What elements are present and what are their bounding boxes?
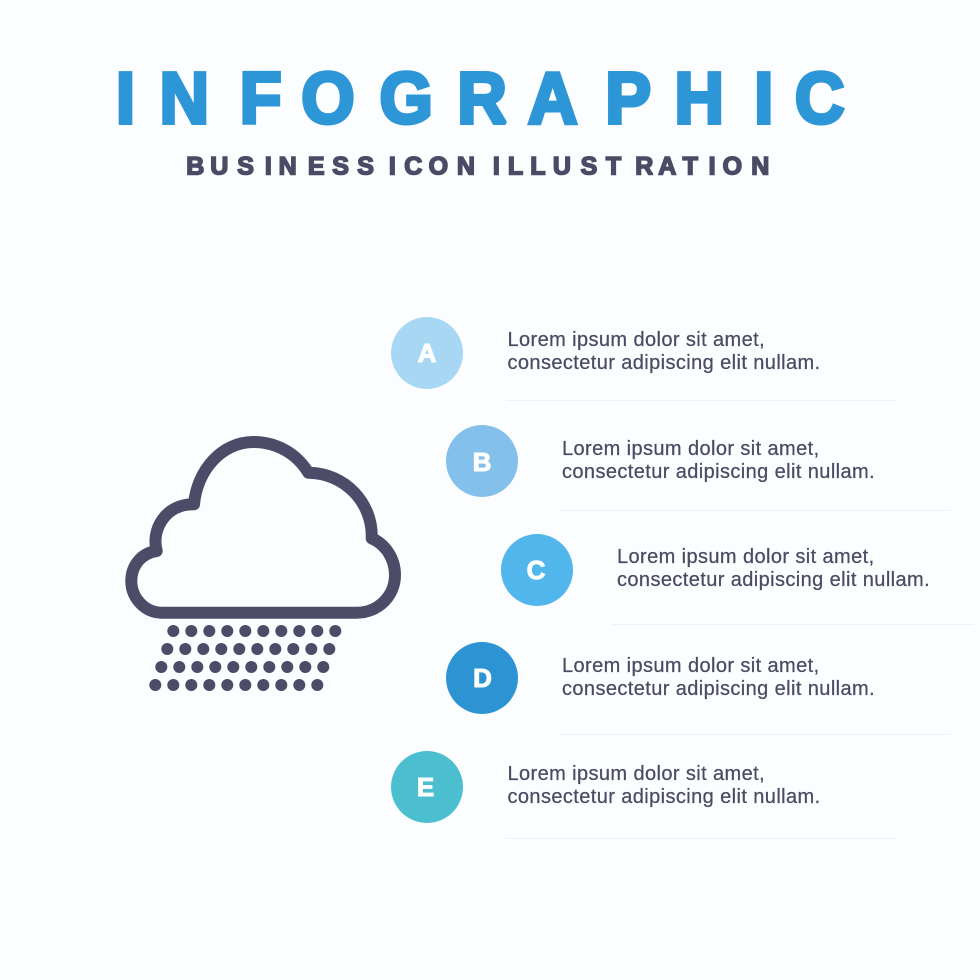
step C circle: [501, 534, 573, 606]
step B circle: B: [473, 447, 491, 477]
step E circle: [391, 751, 463, 823]
icon: cloud with rain dots: [125, 436, 401, 691]
step E text: Lorem ipsum dolor sit amet,: [508, 763, 765, 785]
step B text: [562, 438, 875, 483]
step C text: [617, 546, 930, 591]
step A text: [508, 329, 821, 374]
step D text: [562, 655, 875, 700]
step E text: [508, 763, 821, 808]
step A circle: A: [418, 338, 436, 368]
step D text: Lorem ipsum dolor sit amet,: [562, 655, 820, 677]
step C text: consectetur adipiscing elit nullam.: [617, 569, 930, 591]
step B text: Lorem ipsum dolor sit amet,: [562, 438, 820, 460]
step D circle: D: [473, 663, 492, 693]
step A circle: [391, 317, 463, 389]
step C circle: C: [527, 555, 545, 585]
step E text: consectetur adipiscing elit nullam.: [508, 786, 821, 808]
step B circle: [446, 425, 518, 497]
title: INFOGRAPHIC: [116, 57, 844, 138]
step E circle: E: [417, 772, 434, 802]
step A text: Lorem ipsum dolor sit amet,: [508, 329, 765, 351]
step D text: consectetur adipiscing elit nullam.: [562, 678, 875, 700]
step A text: consectetur adipiscing elit nullam.: [508, 352, 821, 374]
step D circle: [446, 642, 518, 714]
step B text: consectetur adipiscing elit nullam.: [562, 461, 875, 483]
step C text: Lorem ipsum dolor sit amet,: [617, 546, 875, 568]
subtitle: BUSINESS ICON ILLUSTRATION: [186, 152, 769, 180]
